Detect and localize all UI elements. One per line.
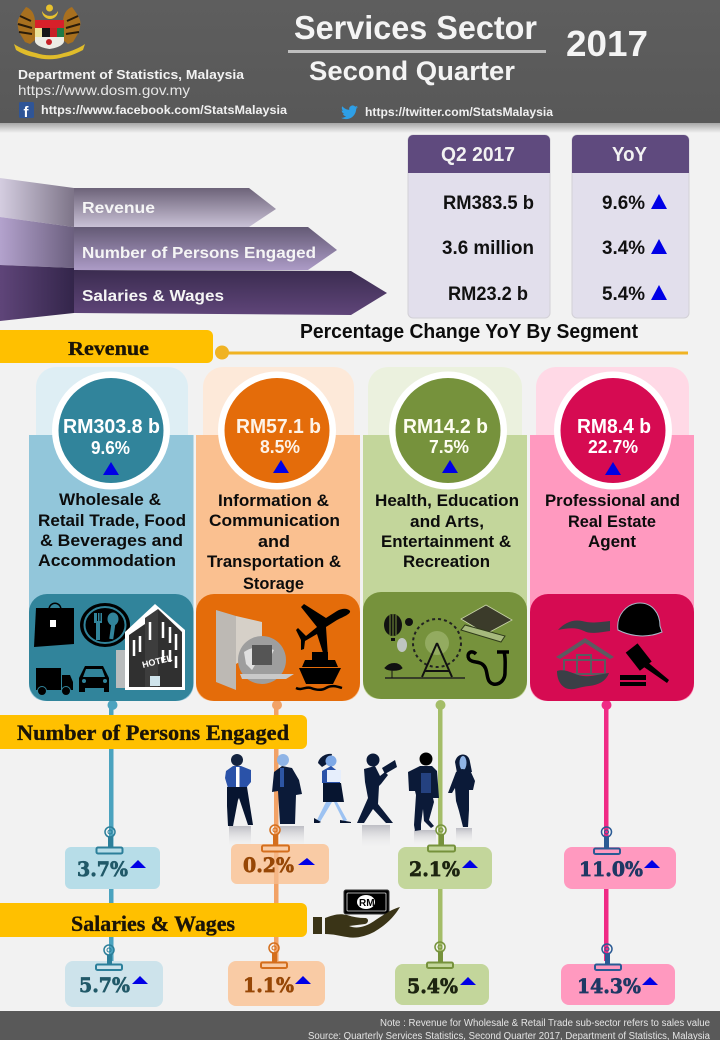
segment label: Communication [209, 511, 340, 530]
icon: restaurant plate [80, 603, 130, 647]
segment label: Storage [243, 574, 304, 593]
icon: ship [296, 652, 342, 690]
data: persons engaged, information: 0.2% [243, 853, 294, 877]
reflections [229, 825, 472, 849]
value circle: RM8.4 b [577, 416, 651, 438]
person 2 [272, 754, 302, 824]
clip marker [96, 827, 122, 854]
value circle: RM57.1 b [236, 416, 321, 438]
department name: Department of Statistics, Malaysia [18, 67, 245, 82]
table column: Q2 2017: RM23.2 b [448, 284, 528, 305]
segment label [375, 491, 519, 571]
person 6 [448, 754, 475, 827]
segment label: and Arts, [410, 512, 484, 531]
icon: facebook [19, 102, 34, 121]
icon: airplane [296, 604, 350, 659]
table column: YoY [572, 135, 689, 318]
segment label [38, 490, 186, 570]
heading pill: revenue [0, 330, 688, 363]
segment label: Entertainment & [381, 532, 511, 551]
value circle: RM303.8 b [63, 416, 160, 438]
icon: hotel building: HOTEL [141, 653, 174, 670]
header banner [0, 0, 720, 133]
data: salaries, information: 1.1% [243, 973, 294, 997]
icon: hand holding money [313, 890, 400, 938]
icon panel [530, 594, 694, 701]
table column: YoY: 9.6% [602, 193, 645, 214]
segment label: Retail Trade, Food [38, 511, 186, 530]
person 4 [357, 754, 397, 823]
data: persons engaged, health: 2.1% [409, 857, 460, 881]
illustration: business people [225, 752, 475, 849]
icon: facebook: f [24, 104, 30, 121]
person 3 [314, 754, 351, 823]
clip marker [261, 943, 287, 968]
value circle: 9.6% [91, 438, 130, 458]
icon: Malaysian coat of arms [14, 4, 85, 59]
segment label: Agent [588, 532, 636, 551]
data: salaries, wholesale [65, 945, 163, 1007]
footnote: Note : Revenue for Wholesale & Retail Trade sub-sector refers to sales value [380, 1018, 710, 1029]
clip marker [595, 944, 621, 970]
clip marker [96, 945, 122, 970]
segment label: Information & [218, 491, 329, 510]
website: https://www.dosm.gov.my [18, 82, 190, 98]
icon: hot air balloon [384, 614, 413, 652]
ribbon: revenue [0, 178, 276, 227]
footer [0, 1011, 720, 1040]
value circle [218, 372, 336, 490]
heading pill: salaries and wages [0, 903, 307, 937]
value circle: RM14.2 b [403, 416, 488, 438]
heading pill: number of persons engaged [0, 715, 307, 749]
ribbon: number of persons engaged [0, 217, 337, 270]
segment label: Transportation & [207, 552, 341, 571]
data: salaries, wholesale: 5.7% [79, 973, 130, 997]
connector lines [108, 700, 612, 961]
person 1 [225, 754, 253, 826]
year: 2017 [566, 23, 648, 64]
icon: delivery truck [36, 668, 73, 696]
segment label: Wholesale & [59, 490, 161, 509]
subtitle: Second Quarter: Second Quarter [309, 56, 515, 86]
segment label: Recreation [403, 552, 490, 571]
ribbon: revenue: Revenue [82, 200, 155, 217]
data: salaries, health [395, 942, 489, 1005]
data: salaries, health: 5.4% [407, 974, 458, 998]
clip marker [427, 942, 453, 968]
data: salaries, professional [561, 944, 675, 1005]
data: persons engaged, professional: 11.0% [579, 857, 643, 881]
segment label: Professional and [545, 491, 680, 510]
ribbon: salaries and wages: Salaries & Wages [82, 288, 224, 305]
heading pill: number of persons engaged: Number of Persons Engaged [17, 720, 289, 745]
segment label [545, 491, 680, 551]
value circle: 22.7% [588, 437, 638, 457]
icon: car [79, 666, 109, 692]
heading pill: salaries and wages: Salaries & Wages [71, 911, 235, 936]
icon: hand holding money: RM [359, 898, 375, 909]
table column: Q2 2017: Q2 2017 [441, 144, 515, 166]
table column: Q2 2017: RM383.5 b [443, 193, 534, 214]
table column: YoY: 5.4% [602, 284, 645, 305]
icon: hands and house [556, 620, 614, 689]
heading pill: revenue: Revenue [68, 338, 149, 360]
value circle: 7.5% [429, 437, 469, 457]
segment label: and [258, 532, 290, 551]
data: persons engaged, information [231, 825, 329, 884]
value circle [52, 372, 170, 490]
panel: health education arts [363, 367, 527, 699]
clip marker [262, 825, 289, 852]
icon: stethoscope [468, 652, 509, 684]
panel: wholesale and retail [29, 367, 194, 701]
icon: gavel [620, 643, 669, 686]
divider line under title [288, 50, 546, 53]
ribbon arrows: headline indicators [0, 178, 387, 321]
icon: hard hat [618, 603, 662, 636]
table column: YoY: 3.4% [602, 238, 645, 259]
panel: information and transportation [196, 367, 360, 701]
data: persons engaged, professional [564, 827, 676, 889]
icon: shopping bag [34, 603, 74, 647]
icon panel [29, 594, 194, 701]
heading: percentage change by segment: Percentage Change YoY By Segment [300, 321, 638, 343]
data: persons engaged, wholesale [65, 827, 160, 889]
data: salaries, information [228, 943, 325, 1006]
icon: twitter [341, 105, 358, 119]
table column: Q2 2017 [408, 135, 550, 318]
table column: Q2 2017: 3.6 million [442, 238, 534, 259]
icon: graduation cap [461, 605, 512, 642]
twitter url: https://twitter.com/StatsMalaysia [365, 105, 553, 119]
icon: ferris wheel [385, 619, 465, 678]
ribbon: salaries and wages [0, 265, 387, 321]
value circle [554, 372, 672, 490]
segment label [207, 491, 341, 593]
title: Services Sector: Services Sector [294, 9, 537, 46]
segment label: & Beverages and [40, 531, 183, 550]
segment label: Real Estate [568, 512, 656, 531]
segment label: Accommodation [38, 551, 176, 570]
clip marker [594, 827, 620, 854]
data: persons engaged, health [398, 825, 492, 889]
table column: YoY: YoY [612, 144, 648, 166]
icon panel [196, 594, 360, 701]
icon: hotel building [116, 604, 185, 690]
segment label: Health, Education [375, 491, 519, 510]
panel: professional and real estate [530, 367, 694, 701]
icon: folder and globe [216, 610, 294, 690]
facebook url: https://www.facebook.com/StatsMalaysia [41, 103, 287, 117]
person 5 [408, 752, 439, 831]
ribbon: number of persons engaged: Number of Persons Engaged [82, 245, 316, 262]
value circle [389, 372, 507, 490]
value circle: 8.5% [260, 437, 300, 457]
data: persons engaged, wholesale: 3.7% [77, 857, 128, 881]
icon panel [363, 592, 527, 699]
data: salaries, professional: 14.3% [577, 974, 641, 998]
clip marker [428, 825, 455, 852]
